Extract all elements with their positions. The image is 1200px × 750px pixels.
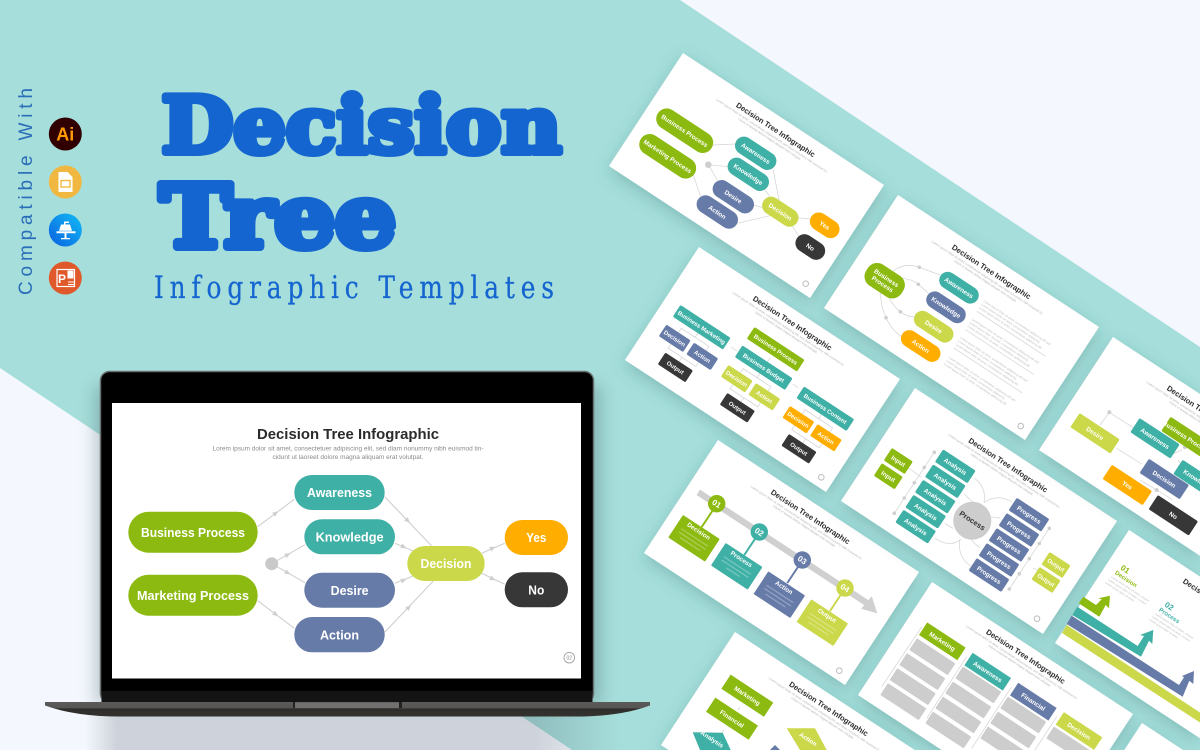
slide card 7: rising arrows (1055, 530, 1200, 738)
step 02 label: Lorem ipsum dolor sit amet, consect (1151, 615, 1191, 643)
header: Decision: Decision (1066, 722, 1092, 742)
box: Analysis 2 (925, 464, 966, 498)
sidebar: compatible with (16, 88, 82, 295)
cluster: Business Budget (708, 341, 796, 431)
box: Progress 2 (999, 513, 1039, 547)
box: Input 2 (874, 463, 903, 489)
card (1055, 530, 1200, 738)
cluster: Business Budget: Business Budget (741, 353, 785, 384)
cluster: Business Budget: Action (754, 390, 773, 406)
box: Progress 5: Progress (975, 565, 1002, 586)
pill: Knowledge (724, 154, 772, 194)
card (609, 53, 884, 298)
pill: Desire: Desire (723, 189, 743, 206)
heading: cidunt ut laoreet dolore magna aliquam erat volutpat. (754, 310, 819, 355)
title: Tree: Tree (160, 167, 396, 268)
pill: Action: Action (320, 628, 359, 642)
heading: Decision Tree Infographic (769, 488, 852, 546)
connector nodes (1107, 410, 1187, 492)
header: Marketing: Marketing (928, 631, 956, 653)
pill: Knowledge: Knowledge (930, 296, 962, 320)
laptop base (45, 702, 650, 716)
slide description: Lorem ipsum dolor sit amet, consectetuer adipiscing elit, sed diam nonummy nibh euismod tin- (212, 446, 484, 452)
heading: Decision Tree Infographic (984, 627, 1067, 686)
page badge (818, 474, 824, 480)
step 02: Process (729, 550, 754, 570)
text list 1: Lorem ipsum dolor sit amet, consectetuer adipiscing elit sed (983, 299, 1052, 346)
laptop side shadow (94, 385, 602, 705)
step 01: Decision (686, 521, 711, 542)
title: Decision: Decision (162, 80, 562, 172)
step 01 label: Lorem ipsum dolor sit amet (1104, 580, 1135, 602)
heading: cidunt ut laoreet dolore magna aliquam erat volutpat. (790, 696, 855, 740)
subtitle: Infographic Templates (154, 269, 554, 306)
text list 3: Lorem ipsum dolor sit amet, consectetuer adipiscing elit (955, 342, 1019, 386)
pill: Yes: Yes (818, 220, 831, 232)
text list 2: Lorem ipsum dolor sit amet, consectetuer adipiscing (969, 321, 1029, 362)
heading: Decision Tree Infographic (950, 243, 1033, 301)
start dot (265, 557, 278, 570)
pill: Yes: Yes (526, 530, 546, 545)
step 01 label: Decision (1113, 570, 1138, 589)
heading: cidunt ut laoreet dolore magna aliquam erat volutpat. (737, 117, 802, 161)
pill: Action: Action (910, 338, 930, 355)
cluster: Business Content: Action (816, 431, 835, 447)
text list 2: Lorem ipsum dolor sit amet, consectetuer adipiscing elit (967, 324, 1031, 368)
connectors (693, 144, 810, 237)
pill: No (792, 231, 829, 263)
box: Input 1: Input (890, 455, 907, 469)
step 02 label: Process (1157, 607, 1181, 626)
rows (880, 638, 955, 720)
arrow: green (1079, 596, 1110, 617)
pill: No: No (528, 582, 544, 598)
icon: Adobe Illustrator (49, 118, 82, 150)
pill: Business Process (652, 104, 717, 157)
laptop lid (100, 372, 594, 702)
step 01: 01 (710, 498, 723, 510)
box: Business Process: Business Process (752, 334, 798, 367)
box: No: No (1167, 511, 1178, 521)
text list 4: Lorem ipsum dolor sit amet, consectetuer adipiscing (946, 359, 1006, 400)
box: Output 1 (1041, 552, 1071, 578)
slide background (112, 403, 581, 678)
heading: cidunt ut laoreet dolore magna aliquam erat volutpat. (987, 644, 1052, 688)
heading: Lorem ipsum dolor sit amet, consectetuer adipiscing elit, sed diam nonummy nibh euismod tin- (732, 291, 845, 367)
pill: Decision: Decision (767, 202, 793, 223)
heading: Decision Tree Infographic (967, 436, 1049, 494)
pill: Business Process: Business Process (141, 525, 245, 540)
card (858, 582, 1133, 750)
box: Knowledge (1173, 460, 1200, 500)
step 04 (797, 576, 857, 646)
box: Progress 1 (1009, 498, 1049, 532)
pill: Awareness: Awareness (943, 276, 975, 301)
slide card 9: flowchart (661, 632, 915, 750)
vertical label: Compatible With (16, 88, 37, 295)
slide title: Decision Tree Infographic (257, 426, 439, 443)
text list 4: Lorem ipsum dolor sit amet, consectetuer adipiscing elit (943, 362, 1007, 406)
pill: Business Process (860, 259, 909, 303)
slide card 3: three org clusters (625, 247, 900, 492)
pill: Action (294, 617, 385, 652)
pill: Knowledge (304, 519, 395, 554)
slide card 4: numbered timeline (644, 440, 919, 685)
pill: Business Process: Process (870, 275, 895, 295)
pill: Desire (911, 308, 957, 346)
heading: Lorem ipsum dolor sit amet, consectetuer adipiscing elit, sed diam nonummy nibh euismod tin- (715, 98, 829, 174)
heading: cidunt ut laoreet dolore magna aliquam erat volutpat. (970, 452, 1034, 497)
box: Analysis 2: Analysis (932, 472, 958, 492)
hub: Process: Process (958, 509, 987, 532)
box: Output 1: Output (1046, 558, 1065, 574)
hinge notch (293, 702, 402, 708)
links between clusters (731, 347, 798, 388)
start dot (705, 161, 712, 168)
box: Decision: Decision (1151, 470, 1177, 490)
heading: Decision Tree Infographic (787, 680, 870, 738)
card (625, 247, 900, 492)
cluster: Business Budget: Decision (724, 370, 748, 389)
pill: Awareness (936, 269, 982, 307)
cluster: Business Marketing: Action (692, 350, 711, 365)
header: Awareness: Awareness (971, 660, 1003, 685)
card (661, 632, 915, 750)
pill: Action (693, 192, 741, 232)
box: Analysis 1 (935, 449, 976, 483)
box: No (1149, 495, 1198, 536)
box: Progress 2: Progress (1005, 520, 1032, 541)
connectors (1100, 412, 1200, 500)
heading: Decision Tree Infographic (751, 294, 834, 352)
box: Progress 3 (989, 528, 1029, 562)
pill: No (505, 572, 568, 607)
box: Analysis 3: Analysis (922, 487, 948, 508)
cluster: Business Marketing (646, 304, 731, 390)
slide card 2: curved list (824, 195, 1099, 440)
pill: Desire: Desire (923, 319, 944, 336)
box: Desire (1070, 413, 1120, 454)
laptop floor shadow (85, 712, 620, 750)
pill: Marketing Process: Marketing Process (642, 139, 693, 176)
page badge: 02 (567, 656, 572, 662)
connectors (894, 452, 1049, 589)
text list 3: Lorem ipsum dolor sit amet, consectetuer adipiscing elit sed (959, 336, 1028, 383)
laptop mockup (45, 372, 650, 716)
box: Output 2 (1031, 567, 1061, 593)
icon: PowerPoint (49, 262, 82, 294)
text list 1: Lorem ipsum dolor sit amet, consectetuer adipiscing elit (978, 306, 1042, 350)
box: Marketing: Marketing (733, 685, 761, 708)
column rails (882, 627, 1057, 750)
box: Analysis 5: Analysis (903, 517, 928, 538)
slide card 10: partial corner (1124, 723, 1183, 750)
page badge (1034, 616, 1040, 622)
connectors (258, 497, 505, 632)
step 01 label: Lorem ipsum dolor sit amet, consect (1107, 578, 1147, 606)
shape: blue corner (770, 745, 780, 750)
card (644, 440, 919, 685)
box: Progress 1: Progress (1015, 505, 1042, 526)
cluster: Business Marketing: Decision (662, 330, 686, 349)
shape: Action: Action (798, 731, 818, 748)
box: Marketing (721, 675, 773, 717)
box: Financial: Financial (718, 709, 745, 730)
cluster: Business Content: Output (789, 442, 808, 458)
step 02 (711, 520, 771, 590)
rows (980, 697, 1046, 750)
box: Awareness (1130, 418, 1180, 459)
connector nodes (892, 450, 1051, 591)
step 03 (754, 548, 814, 618)
screen slide (112, 403, 581, 678)
pill: Awareness (294, 475, 385, 510)
cluster: Business Marketing: Business Marketing (676, 311, 726, 346)
step 02 label (1148, 597, 1200, 647)
column 3 (980, 683, 1057, 750)
text list 4: Lorem ipsum dolor sit amet, consectetuer adipiscing elit sed (948, 355, 1017, 403)
icon: Google Slides (49, 166, 82, 198)
pill: Marketing Process: Marketing Process (137, 588, 249, 603)
lower bezel (102, 691, 592, 702)
pill: Decision: Decision (420, 556, 472, 571)
box: Awareness: Awareness (1139, 427, 1171, 451)
pill: No: No (804, 242, 815, 253)
page badge (564, 652, 575, 663)
slide description: cidunt ut laoreet dolore magna aliquam erat volutpat. (272, 454, 424, 461)
box: Progress 4 (979, 543, 1019, 577)
cluster: Business Content: Decision (786, 411, 810, 430)
pill: Marketing Process (635, 130, 700, 183)
box: Output 2: Output (1036, 573, 1055, 589)
icon: Keynote (49, 214, 82, 246)
curve nodes (884, 265, 921, 320)
pill: Business Process: Business Process (660, 114, 709, 149)
column 1 (880, 622, 966, 720)
pill: Decision (759, 193, 802, 230)
column 2 (925, 653, 1011, 748)
curved connectors (881, 265, 940, 337)
step 04: 04 (839, 582, 851, 595)
pill: Marketing Process (128, 575, 258, 616)
box: Input 1 (884, 448, 913, 474)
pill: Decision (407, 546, 485, 581)
step 02 label: Lorem ipsum dolor sit amet, consect (1154, 612, 1194, 640)
hub: Process (946, 494, 999, 547)
box: Analysis 4: Analysis (913, 502, 938, 523)
box: Decision (1140, 459, 1189, 499)
connectors (721, 707, 740, 735)
box: Financial (706, 698, 758, 740)
box: Yes (1103, 465, 1152, 505)
pill: Knowledge: Knowledge (732, 163, 764, 187)
pill: Action: Action (707, 204, 727, 221)
page badge (836, 668, 842, 674)
shape: Action (787, 728, 827, 750)
step 03: 03 (796, 554, 809, 567)
step 01 label (1104, 560, 1159, 610)
box: Progress 4: Progress (985, 550, 1012, 571)
cluster: Business Content: Business Content (802, 393, 847, 426)
box: Progress 5 (969, 558, 1009, 592)
slide card 8: four-column table (858, 582, 1133, 750)
card (1039, 337, 1200, 556)
box: Analysis 1: Analysis (942, 457, 968, 477)
card (824, 195, 1099, 440)
shape: Analysis (693, 730, 731, 750)
step 01 (668, 492, 729, 562)
shape: Analysis: Analysis (699, 730, 725, 750)
slide description (212, 446, 484, 461)
text list 3: Lorem ipsum dolor sit amet, consectetuer adipiscing (957, 339, 1018, 381)
pill: Awareness: Awareness (739, 142, 771, 166)
box: Desire: Desire (1085, 426, 1105, 442)
step 01 label: Lorem ipsum dolor sit amet, consect (1110, 575, 1150, 603)
step 02 label: 02 (1163, 600, 1176, 613)
text list 2: Lorem ipsum dolor sit amet, consectetuer adipiscing elit sed (971, 317, 1040, 365)
slide card 1: decision tree pills (609, 53, 884, 298)
heading: Lorem ipsum dolor sit amet, consectetuer adipiscing elit, sed diam nonummy nibh euismod tin- (947, 433, 1061, 509)
heading: Lorem ipsum dolor sit amet, consectetuer adipiscing elit, sed diam nonummy nibh euismod tin- (931, 240, 1044, 316)
box: Business Process (747, 327, 805, 372)
header: Financial: Financial (1020, 692, 1046, 713)
icon: Adobe Illustrator: Ai (56, 124, 74, 144)
step 03: Action (774, 580, 794, 596)
pill: Yes (505, 520, 568, 555)
pill: Action (898, 327, 944, 365)
box: Analysis 4 (905, 495, 946, 529)
pill: Yes (806, 209, 843, 242)
cluster: Business Budget: Output (727, 401, 746, 417)
step 02: 02 (753, 526, 766, 539)
rows (925, 667, 1001, 748)
slide card 5: process hub (841, 388, 1117, 634)
arrowheads (272, 509, 497, 618)
heading: Lorem ipsum dolor sit amet, consectetuer adipiscing elit, sed diam nonummy nibh euismod tin- (965, 624, 1079, 701)
rows (1046, 726, 1090, 750)
step 01 label: 01 (1119, 563, 1132, 576)
box: Progress 3: Progress (995, 535, 1022, 556)
cluster: Business Marketing: Output (665, 361, 684, 376)
heading: cidunt ut laoreet dolore magna aliquam erat volutpat. (953, 259, 1018, 303)
pill: Knowledge (923, 288, 969, 326)
card (841, 388, 1117, 634)
pill: Knowledge: Knowledge (316, 530, 384, 544)
heading: cidunt ut laoreet dolore magna aliquam erat volutpat. (772, 504, 837, 548)
heading: Lorem ipsum dolor sit amet, consectetuer adipiscing elit, sed diam nonummy nibh euismod tin- (750, 485, 863, 561)
page badge (803, 281, 808, 287)
arrow: teal (1072, 607, 1153, 657)
pill: Awareness (732, 133, 780, 173)
column 4 (1046, 712, 1102, 750)
pill: Awareness: Awareness (307, 485, 372, 500)
band: lime (1062, 625, 1200, 722)
text list 1: Lorem ipsum dolor sit amet, consectetuer adipiscing (981, 303, 1041, 344)
pill: Desire: Desire (331, 583, 369, 598)
pill: Desire (304, 573, 395, 608)
step 02 label: Lorem ipsum dolor sit amet (1148, 617, 1179, 639)
timeline arrow (694, 485, 884, 618)
pill: Business Process (128, 512, 258, 553)
cluster: Business Content (769, 386, 855, 472)
pill: Desire (709, 177, 757, 217)
slide card 6: rectangular decision tree (1039, 337, 1200, 556)
heading: Decision Tree Infographic (734, 101, 817, 159)
page badge (1018, 423, 1024, 429)
icon: PowerPoint: P (58, 272, 66, 286)
box: Yes: Yes (1120, 480, 1134, 492)
step 04: Output (816, 607, 838, 625)
arrow: blue (1067, 616, 1194, 697)
box: Analysis 5 (895, 510, 936, 544)
box: Input 2: Input (880, 470, 897, 485)
box: Analysis 3 (915, 480, 956, 514)
pill: Business Process: Business (872, 268, 900, 289)
